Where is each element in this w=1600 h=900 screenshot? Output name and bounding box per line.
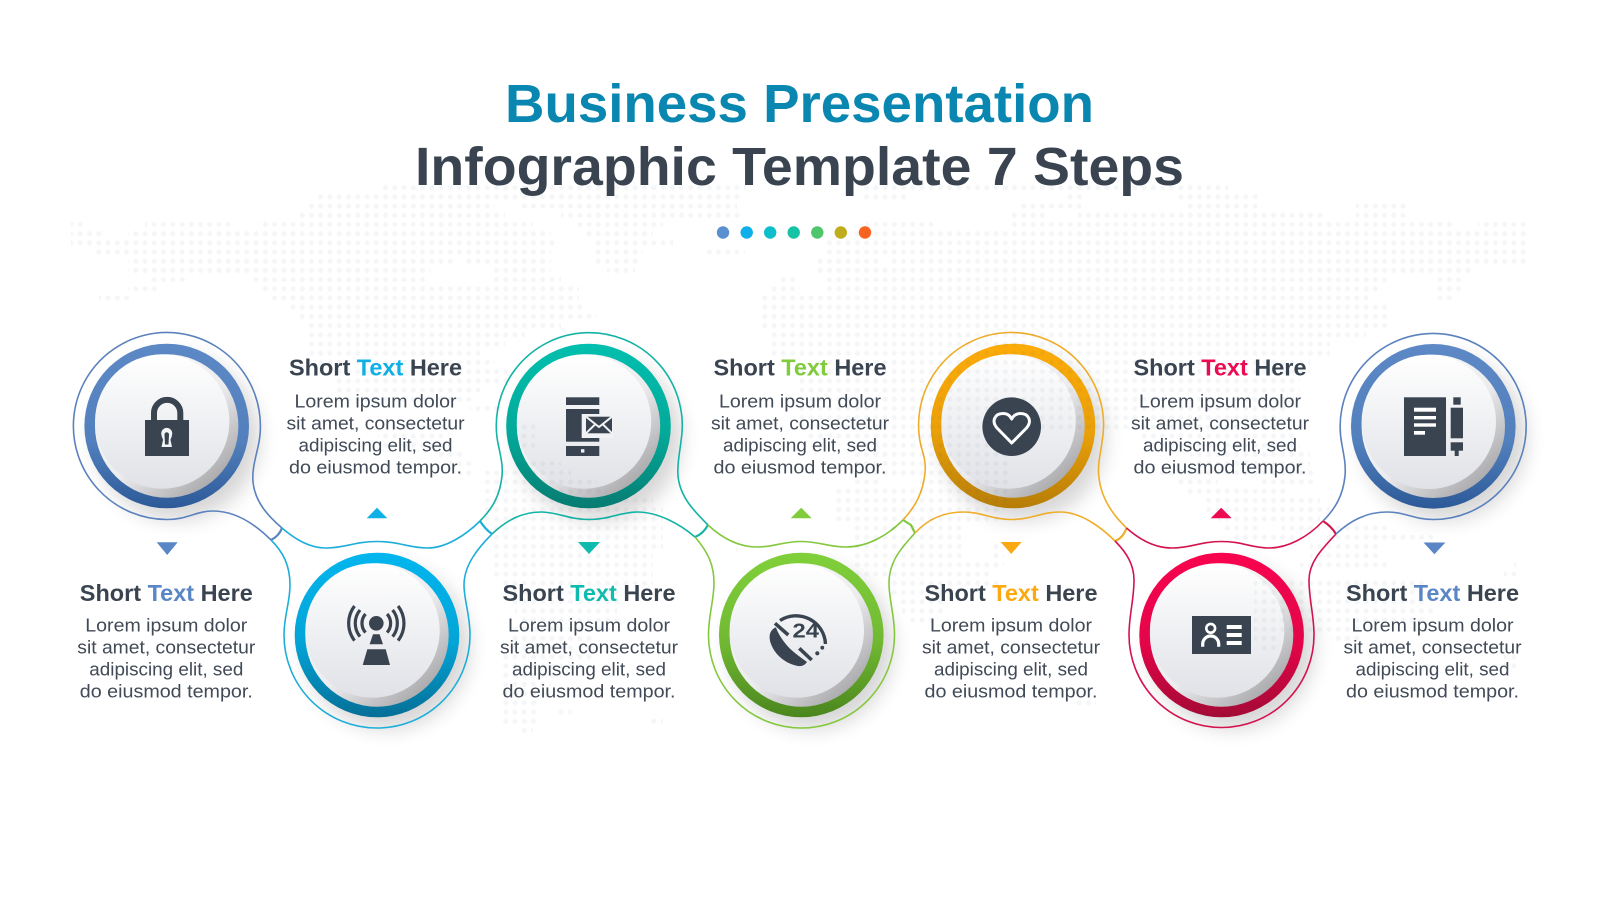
- body text: step 1: adipiscing elit, sed: [89, 659, 243, 680]
- ring button: step 1: [84, 344, 249, 508]
- body text: step 1: Lorem ipsum dolor: [85, 615, 247, 636]
- icon: notebook and pen: [1404, 397, 1463, 456]
- icon: id card: [1192, 616, 1251, 654]
- body text: step 1: [77, 615, 255, 701]
- body text: step 5: adipiscing elit, sed: [934, 659, 1088, 680]
- body text: step 2: adipiscing elit, sed: [298, 434, 452, 455]
- triangle marker: step 6: [1211, 508, 1232, 518]
- body text: step 6: Lorem ipsum dolor: [1139, 390, 1301, 411]
- triangle marker: step 2: [367, 508, 387, 518]
- body text: step 3: do eiusmod tempor.: [502, 680, 676, 701]
- dotted world map: [71, 188, 1527, 730]
- icon: heart badge: [982, 397, 1041, 456]
- icon: 24 hour phone: 24: [793, 619, 820, 642]
- body text: step 6: sit amet, consectetur: [1131, 412, 1309, 433]
- icon: phone with envelope: [566, 397, 613, 456]
- heading: step 6: Short Text Here: [1134, 355, 1306, 381]
- body text: step 3: sit amet, consectetur: [500, 637, 678, 658]
- icon: broadcast antenna: [349, 606, 404, 665]
- heading: step 4: Short Text Here: [714, 355, 886, 381]
- outline: step 5: [903, 332, 1126, 541]
- body text: step 5: [922, 615, 1100, 701]
- body text: step 7: [1344, 615, 1522, 701]
- panel: step 7: [1323, 334, 1526, 701]
- title: [415, 74, 1184, 197]
- panel: step 5: [903, 332, 1126, 701]
- body text: step 6: do eiusmod tempor.: [1134, 456, 1306, 477]
- title line 1: Business Presentation: [505, 74, 1094, 134]
- ring button: step 7: [1351, 344, 1516, 509]
- heading: step 7: Short Text Here: [1346, 580, 1519, 606]
- outline: step 2: [271, 521, 492, 728]
- ring button: step 5: [931, 344, 1095, 508]
- outline: step 3: [480, 333, 708, 537]
- title line 2: Infographic Template 7 Steps: [415, 137, 1184, 197]
- heading: step 2: Short Text Here: [289, 355, 462, 381]
- body text: step 1: do eiusmod tempor.: [80, 680, 253, 701]
- body text: step 6: adipiscing elit, sed: [1143, 434, 1297, 455]
- triangle marker: step 4: [791, 508, 812, 518]
- triangle marker: step 7: [1424, 542, 1445, 554]
- body text: step 7: do eiusmod tempor.: [1346, 680, 1519, 701]
- outline: step 1: [73, 333, 282, 540]
- body text: step 7: Lorem ipsum dolor: [1352, 615, 1514, 636]
- body text: step 5: Lorem ipsum dolor: [930, 615, 1092, 636]
- heading: step 5: Short Text Here: [924, 580, 1098, 606]
- panel: step 2: [271, 355, 492, 729]
- body text: step 4: adipiscing elit, sed: [723, 434, 877, 455]
- heading: step 1: Short Text Here: [80, 580, 253, 606]
- body text: step 4: do eiusmod tempor.: [714, 456, 886, 477]
- icon: padlock: [145, 400, 189, 456]
- panel: step 4: [695, 355, 915, 729]
- panel: step 1: [73, 333, 282, 701]
- ring button: step 3: [506, 344, 671, 508]
- body text: step 2: do eiusmod tempor.: [289, 456, 462, 477]
- heading: step 3: Short Text Here: [502, 580, 676, 606]
- body text: step 6: [1131, 390, 1309, 477]
- ring button: step 6: [1139, 553, 1304, 717]
- body text: step 2: sit amet, consectetur: [286, 412, 464, 433]
- body text: step 7: sit amet, consectetur: [1344, 637, 1522, 658]
- panel: step 3: [480, 333, 708, 701]
- triangle marker: step 5: [1001, 542, 1022, 554]
- icon: 24 hour phone: [770, 616, 826, 666]
- ring button: step 4: [719, 553, 884, 717]
- body text: step 1: sit amet, consectetur: [77, 637, 255, 658]
- outline: step 6: [1115, 521, 1336, 728]
- body text: step 2: [286, 390, 464, 477]
- body text: step 7: adipiscing elit, sed: [1356, 659, 1510, 680]
- body text: step 4: sit amet, consectetur: [711, 412, 889, 433]
- outline: step 4: [695, 520, 915, 728]
- outline: step 7: [1323, 334, 1526, 534]
- body text: step 4: Lorem ipsum dolor: [719, 390, 881, 411]
- panel: step 6: [1115, 355, 1336, 729]
- colour dots row: [717, 226, 871, 239]
- body text: step 2: Lorem ipsum dolor: [294, 390, 456, 411]
- triangle marker: step 1: [157, 542, 178, 555]
- body text: step 5: do eiusmod tempor.: [924, 680, 1098, 701]
- body text: step 4: [711, 390, 889, 477]
- body text: step 5: sit amet, consectetur: [922, 637, 1100, 658]
- ring button: step 2: [295, 553, 459, 717]
- body text: step 3: adipiscing elit, sed: [512, 659, 666, 680]
- body text: step 3: Lorem ipsum dolor: [508, 615, 670, 636]
- body text: step 3: [500, 615, 678, 701]
- triangle marker: step 3: [578, 542, 600, 554]
